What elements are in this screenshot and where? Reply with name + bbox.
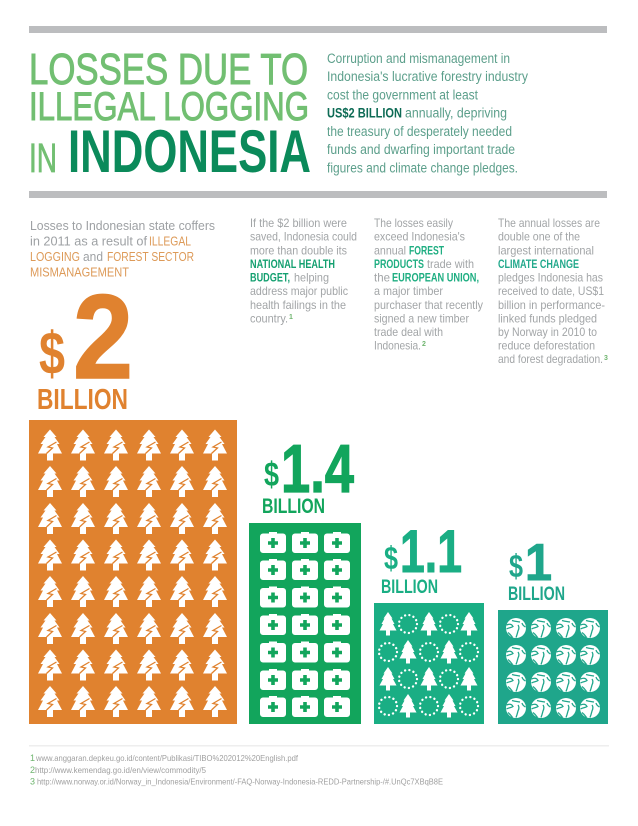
column: climate change pledges: billion in performance- (498, 298, 605, 312)
left description: and (83, 249, 103, 264)
footnotes: http://www.norway.or.id/Norway_in_Indonesia/Environment/-FAQ-Norway-Indonesia-REDD-Partnership-/#.UnQc7XBqB8E (37, 776, 443, 786)
figure: $2 billion: $ (39, 320, 65, 387)
intro paragraph: Indonesia's lucrative forestry industry (327, 69, 528, 84)
footnotes: 3 (30, 776, 35, 786)
figure: $1 billion: 1 (525, 534, 552, 592)
intro paragraph: funds and dwarfing important trade (327, 142, 515, 157)
intro paragraph: Corruption and mismanagement in (327, 51, 510, 66)
column: forest products trade: the (374, 270, 390, 284)
title: ILLEGAL LOGGING (29, 85, 309, 129)
column: national health budget: address major public (250, 284, 348, 298)
column: forest products trade: annual (374, 243, 406, 257)
column: climate change pledges: linked funds pledged (498, 311, 597, 325)
column: national health budget: BUDGET, (250, 270, 290, 284)
column: national health budget: 1 (289, 314, 293, 321)
column: forest products trade: signed a new timber (374, 311, 469, 325)
left description: Losses to Indonesian state coffers (30, 218, 215, 233)
figure: $1.1 billion: 1.1 (400, 518, 462, 585)
panel: orange trees $2 billion (29, 420, 237, 724)
column: climate change pledges: received to date, US$1 (498, 284, 604, 298)
figure: $2 billion: 2 (73, 270, 133, 404)
intro paragraph: the treasury of desperately needed (327, 124, 512, 139)
column: forest products trade: PRODUCTS (374, 257, 424, 271)
column: forest products trade: 2 (422, 341, 426, 348)
intro paragraph: figures and climate change pledges. (327, 160, 518, 176)
figure: $1 billion: $ (509, 548, 523, 584)
figure: $2 billion (37, 270, 133, 416)
column: forest products trade: Indonesia. (374, 338, 421, 352)
panel: teal globes $1 billion (498, 610, 608, 724)
left description: in 2011 as a result of (30, 234, 147, 248)
title: INDONESIA (68, 118, 311, 185)
figure: $1.1 billion: BILLION (381, 577, 438, 598)
column: forest products trade: a major timber (374, 284, 443, 298)
column: forest products trade: exceed Indonesia's (374, 230, 465, 244)
column: climate change pledges (498, 216, 608, 366)
column: climate change pledges: double one of the (498, 230, 580, 244)
title: LOSSES DUE TO (29, 45, 308, 94)
column: climate change pledges: largest international (498, 243, 594, 257)
figure: $1.4 billion: BILLION (262, 495, 325, 518)
intro paragraph: US$2 BILLION (327, 106, 402, 120)
column: national health budget: saved, Indonesia could (250, 230, 357, 244)
column: national health budget: country. (250, 311, 288, 325)
figure: $1.1 billion: $ (384, 540, 398, 576)
title (29, 45, 311, 185)
footnotes: 2 (30, 765, 35, 775)
left description (30, 218, 215, 280)
footnotes: www.anggaran.depkeu.go.id/content/Publikasi/TIBO%202012%20English.pdf (35, 753, 299, 763)
column: climate change pledges: pledges Indonesia has (498, 270, 603, 284)
panel: teal trees and rings $1.1 billion (374, 603, 484, 724)
top rule (29, 26, 607, 33)
left description: FOREST SECTOR (107, 249, 194, 264)
column: climate change pledges: and forest degradation. (498, 352, 603, 366)
column: forest products trade: trade deal with (374, 325, 443, 339)
column: climate change pledges: reduce deforestation (498, 338, 595, 352)
column: national health budget: If the $2 billion were (250, 216, 347, 230)
column: climate change pledges: by Norway in 2010 to (498, 325, 597, 339)
figure: $1 billion: BILLION (508, 584, 565, 605)
column: forest products trade: The losses easily (374, 216, 453, 230)
footnotes: http://www.kemendag.go.id/en/view/commodity/5 (35, 765, 206, 775)
header bottom rule (29, 191, 607, 198)
figure: $1.4 billion: 1.4 (281, 431, 354, 507)
footnotes: 1 (30, 753, 35, 763)
figure: $1 billion (508, 534, 565, 605)
column: national health budget: more than double its (250, 243, 347, 257)
column: forest products trade: EUROPEAN UNION, (392, 270, 479, 284)
left description: MISMANAGEMENT (30, 264, 129, 280)
column: national health budget: NATIONAL HEALTH (250, 257, 335, 271)
column: forest products trade: trade with (427, 257, 474, 271)
left description: ILLEGAL (149, 234, 191, 248)
title: IN (29, 135, 57, 181)
column: forest products trade: purchaser that recently (374, 298, 483, 312)
column: national health budget: helping (294, 270, 329, 284)
figure: $1.4 billion (262, 431, 354, 518)
intro paragraph: cost the government at least (327, 88, 478, 102)
column: national health budget: health failings in the (250, 298, 346, 312)
column: climate change pledges: The annual losses are (498, 216, 600, 230)
column: climate change pledges: 3 (604, 355, 608, 362)
figure: $1.1 billion (381, 518, 462, 598)
figure: $1.4 billion: $ (264, 456, 279, 494)
intro paragraph (327, 51, 528, 176)
footnotes (30, 753, 443, 786)
column: national health budget (250, 216, 357, 325)
left description: LOGGING (30, 249, 80, 264)
column: forest products trade: FOREST (409, 243, 444, 257)
column: forest products trade (374, 216, 483, 352)
column: climate change pledges: CLIMATE CHANGE (498, 257, 579, 271)
intro paragraph: annually, depriving (405, 106, 507, 120)
panel: green medical kits $1.4 billion (249, 523, 361, 724)
figure: $2 billion: BILLION (37, 384, 128, 416)
